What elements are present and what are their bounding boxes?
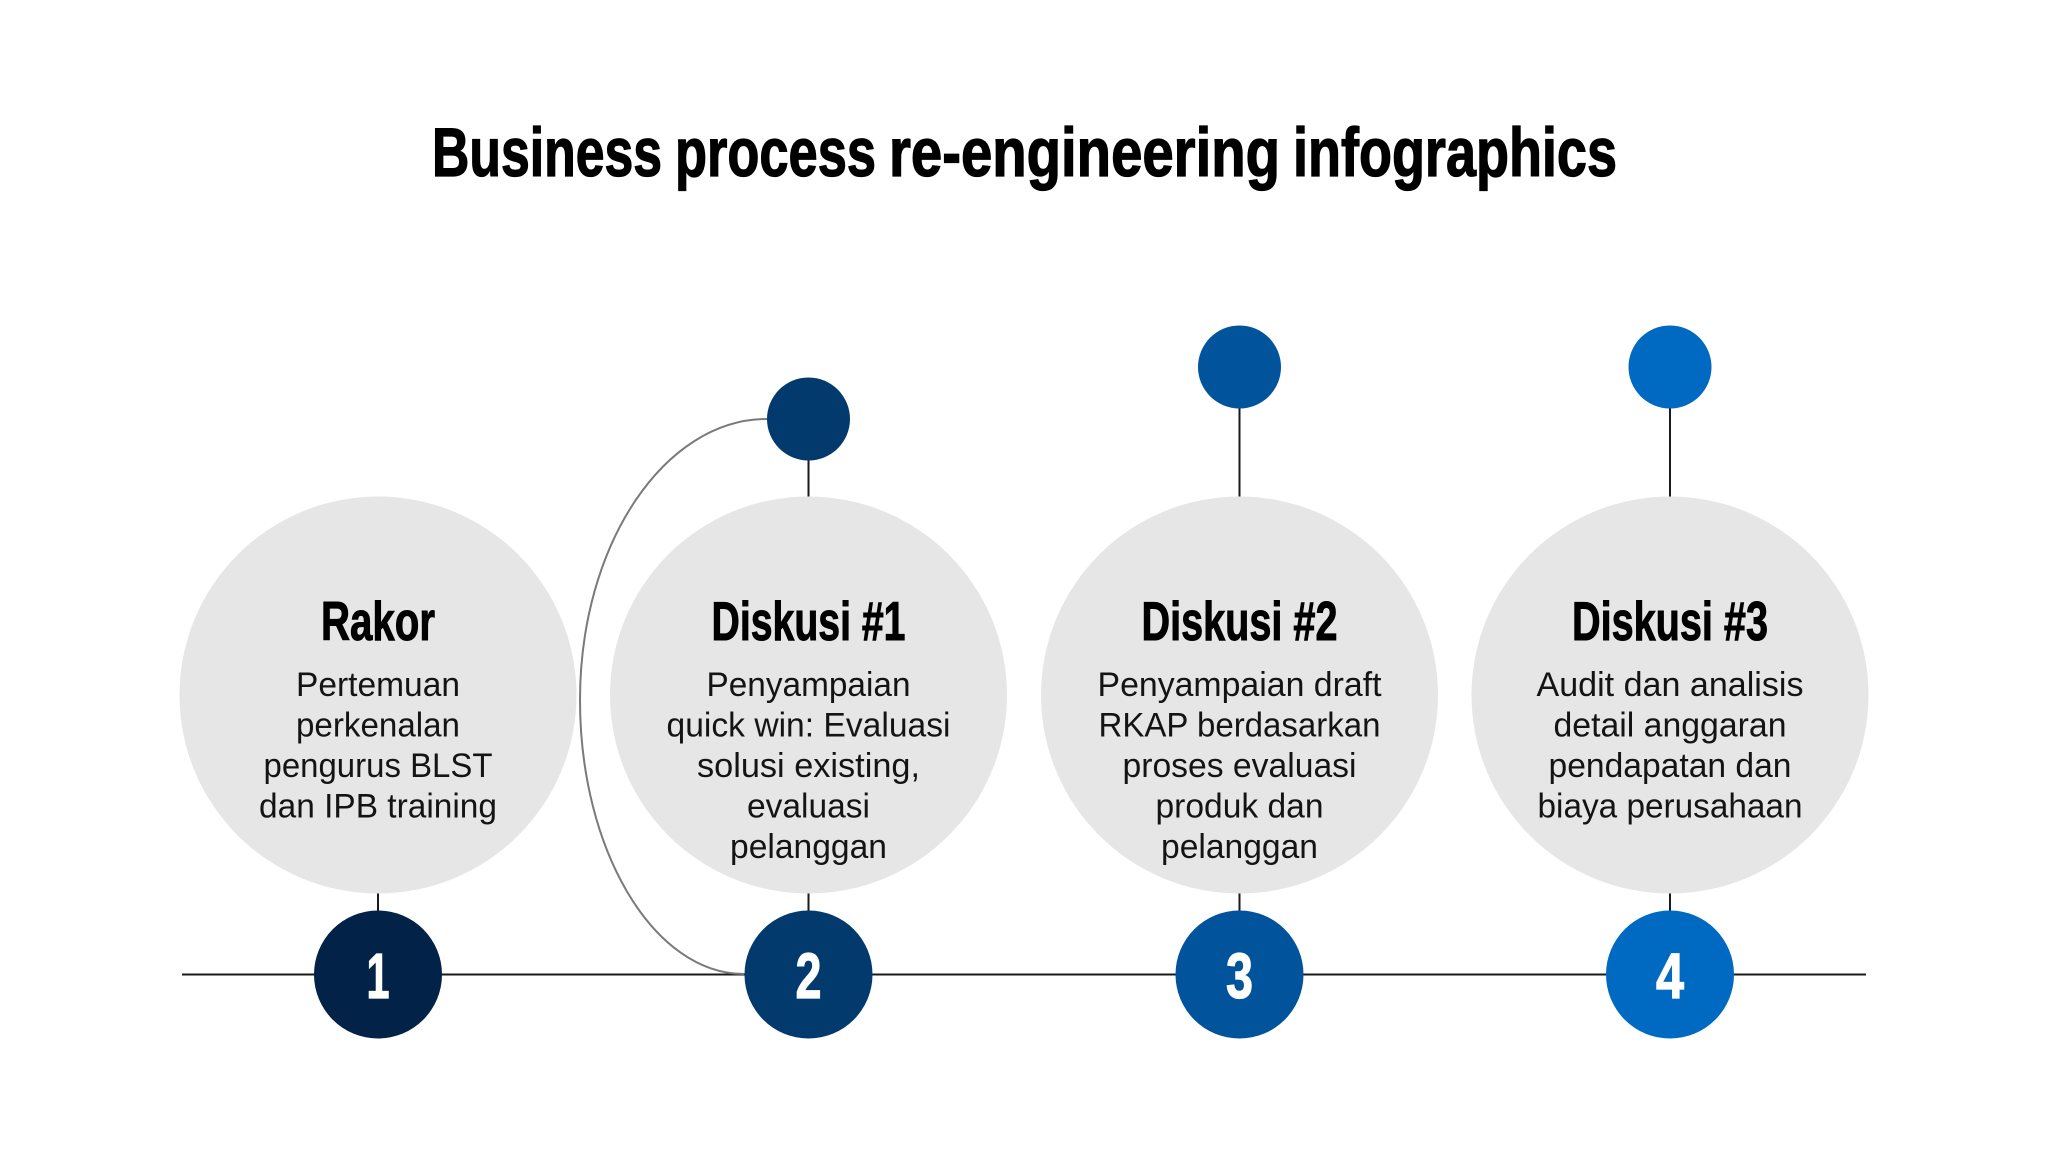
panel: step 3 Diskusi #2 [1041,326,1438,1038]
top dot 2 [767,378,850,460]
title: infographics [1293,114,1617,191]
heading: Diskusi #3: Diskusi #3 [1572,590,1768,652]
number badge 2 [744,910,872,1038]
number badge 3: 3 [1226,940,1253,1012]
text block: Diskusi #2 description: proses evaluasi [1122,747,1356,785]
panel: step 1 Rakor [180,496,576,1038]
number badge 1: 1 [366,940,390,1012]
number badge 2: 2 [796,940,822,1012]
text block: Diskusi #2 description: produk dan [1156,788,1324,826]
text block: Diskusi #2 description [1098,666,1382,866]
big grey circle 1 [180,496,576,894]
title: re-engineering [889,114,1280,191]
text block: Diskusi #3 description: pendapatan dan [1548,747,1792,785]
top dot 4 [1628,326,1712,408]
text block: Rakor description: pengurus BLST [264,747,492,785]
title: Business [432,114,662,191]
curved connector arrow from step 2 up to top dot [580,419,767,974]
top dot 3 [1198,326,1281,408]
text block: Diskusi #3 description: biaya perusahaan [1538,788,1802,826]
text block: Diskusi #1 description: pelanggan [730,828,887,866]
number badge 4 [1606,910,1734,1038]
timeline axis [182,974,1866,976]
text block: Rakor description: perkenalan [296,706,460,744]
number badge 3 [1176,910,1304,1038]
big grey circle 4 [1472,496,1868,894]
text block: Diskusi #2 description: RKAP berdasarkan [1098,706,1380,744]
number badge 4: 4 [1656,940,1684,1012]
text block: Diskusi #2 description: pelanggan [1161,828,1318,866]
big grey circle 3 [1041,496,1438,894]
text block: Diskusi #1 description: solusi existing, [697,747,920,785]
title [432,114,1617,191]
heading: Rakor: Rakor [321,590,435,652]
text block: Rakor description: Pertemuan [296,666,460,704]
text block: Diskusi #1 description: Penyampaian [706,666,910,704]
text block: Rakor description [259,666,497,826]
title: process [675,114,876,191]
big grey circle 2 [610,496,1007,894]
text block: Rakor description: dan IPB training [259,788,497,826]
text block: Diskusi #1 description [666,666,950,866]
text block: Diskusi #3 description: Audit dan analisis [1536,666,1804,704]
text block: Diskusi #1 description: quick win: Evaluasi [666,706,950,744]
number badge 1 [314,910,442,1038]
panel: step 4 Diskusi #3 [1472,326,1868,1038]
text block: Diskusi #3 description [1536,666,1804,826]
heading: Diskusi #1: Diskusi #1 [712,590,906,652]
panel: step 2 Diskusi #1 [610,378,1007,1038]
text block: Diskusi #1 description: evaluasi [747,788,870,826]
text block: Diskusi #3 description: detail anggaran [1554,706,1786,744]
text block: Diskusi #2 description: Penyampaian draft [1098,666,1382,704]
heading: Diskusi #2: Diskusi #2 [1142,590,1338,652]
